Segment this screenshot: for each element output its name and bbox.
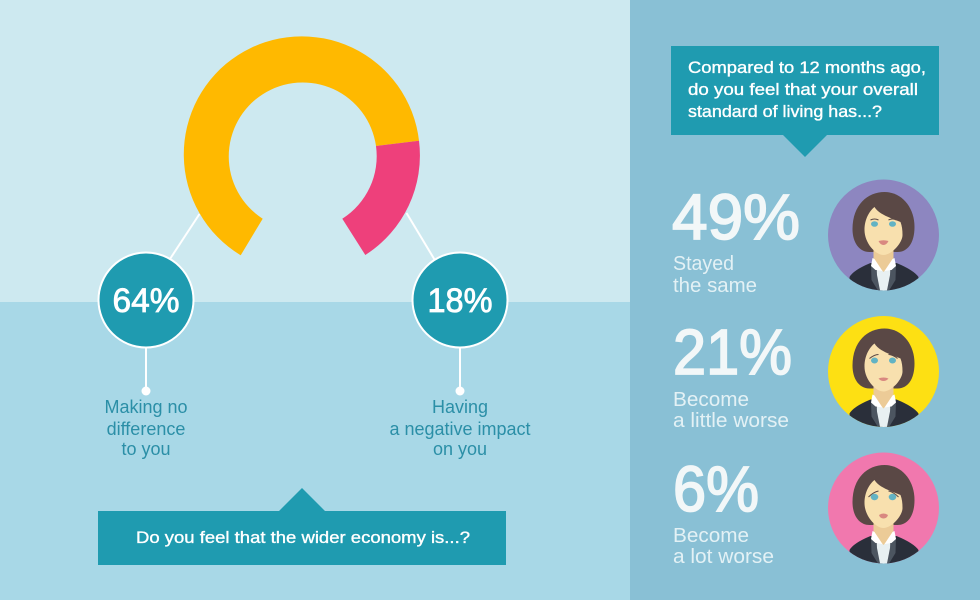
label: making no difference to you: Making no [104, 397, 188, 417]
bubble: 18%: 18% [428, 282, 492, 320]
label: having a negative impact on you: Having [432, 397, 488, 417]
stat: 49% stayed the same: Stayed [673, 253, 734, 275]
label: having a negative impact on you [389, 397, 531, 459]
stat: 21% become a little worse: Become [673, 389, 749, 411]
stat: 49% stayed the same: the same [673, 275, 757, 297]
stat: 6% become a lot worse: a lot worse [673, 546, 774, 568]
callout: standard of living question: do you feel that your overall [688, 81, 918, 99]
connector: left diagonal line [168, 214, 200, 262]
label: making no difference to you: to you [121, 439, 171, 459]
icon: woman, sad, pink circle [828, 452, 939, 570]
stat: 21% become a little worse: a little worse [673, 410, 789, 432]
bubble: 64% [98, 252, 194, 348]
callout: wider economy question: Do you feel that the wider economy is...? [136, 529, 470, 547]
stat: 21% become a little worse [673, 316, 792, 432]
panel: top left background [0, 0, 630, 302]
stat: 49% stayed the same [672, 181, 800, 297]
stat: 49% stayed the same: 49% [672, 181, 800, 253]
stat: 64% making no difference [98, 252, 194, 459]
donut segment: 18% pink [342, 141, 420, 255]
connector: right diagonal line [406, 213, 436, 262]
callout: standard of living question: Compared to 12 months ago, [688, 59, 926, 77]
stat: 21% become a little worse: 21% [673, 316, 792, 388]
callout: standard of living question [671, 46, 939, 157]
panel: bottom left background [0, 302, 630, 600]
label: making no difference to you: difference [107, 419, 185, 439]
bubble: 64%: 64% [112, 282, 180, 320]
donut segment: 64% yellow [184, 36, 419, 255]
panel: right background [630, 0, 980, 600]
icon: woman, slightly sad, yellow circle [828, 316, 939, 434]
label: having a negative impact on you: a negative impact [389, 419, 531, 439]
leader line with dot [142, 346, 150, 396]
callout: standard of living question: standard of living has...? [688, 103, 882, 121]
leader line with dot [456, 346, 464, 396]
stat: 18% negative impact [389, 252, 531, 459]
stat: 6% become a lot worse: Become [673, 525, 749, 547]
stat: 6% become a lot worse: 6% [673, 453, 759, 525]
label: making no difference to you [104, 397, 188, 459]
icon: woman, neutral, purple circle [828, 180, 939, 297]
label: having a negative impact on you: on you [433, 439, 487, 459]
callout: wider economy question [98, 488, 506, 565]
stat: 6% become a lot worse [673, 453, 774, 568]
donut chart [184, 36, 420, 255]
bubble: 18% [412, 252, 508, 348]
